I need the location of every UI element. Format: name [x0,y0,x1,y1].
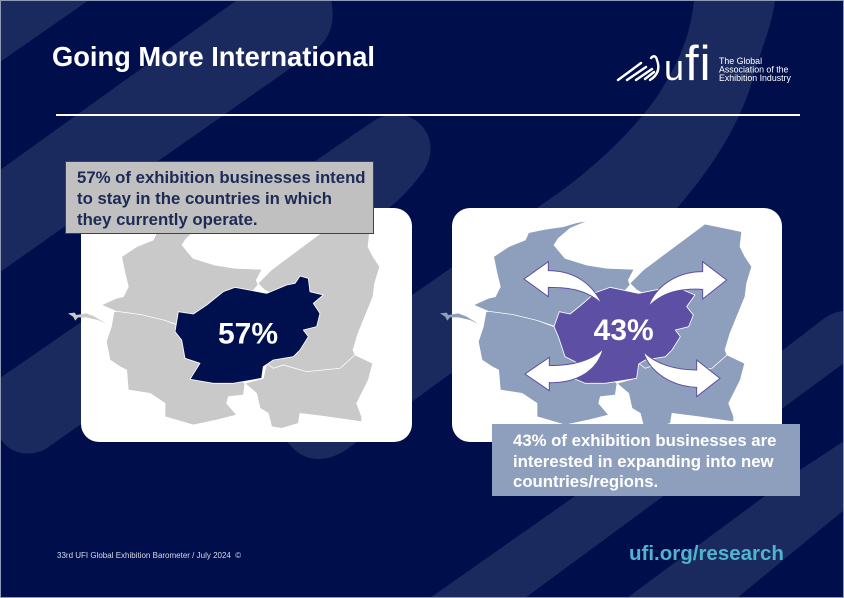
icon: logo mark [618,56,658,80]
logo wordmark: ufi [664,37,712,91]
map: stay in current countries [68,221,380,428]
logo tagline: Exhibition Industry [719,73,791,83]
stat 43%: 43% [594,314,654,347]
callout: 43%: interested in expanding into new [513,452,775,471]
map highlight purple [554,287,695,383]
map regions grey [68,221,380,428]
map: expanding into new countries [440,221,752,428]
arrow: lower right [643,352,720,397]
callout: 43%: 43% of exhibition businesses are [513,431,776,450]
callout: 57%: 57% of exhibition businesses intend [77,168,366,187]
panel: left map card [81,208,412,442]
arrow: upper right [648,262,727,307]
map highlight dark [175,276,323,383]
callout: 43% [492,424,800,496]
map regions blue [440,221,752,428]
title: Going More International [52,41,375,72]
callout: 57% [66,162,374,234]
logo tagline: The Global [719,56,762,66]
footer source note: 33rd UFI Global Exhibition Barometer / July 2024 © [57,551,241,560]
callout: 57%: to stay in the countries in which [77,189,332,208]
stat 57%: 57% [218,318,278,350]
callout: 57%: they currently operate. [77,210,258,229]
callout: 43%: countries/regions. [513,472,658,491]
arrow: upper left [524,262,602,303]
logo tagline: Association of the [719,64,789,74]
arrow: lower left [525,348,603,391]
panel: right map card [452,208,782,442]
footer link: ufi.org/research [629,542,784,565]
UFI logo [618,37,791,91]
